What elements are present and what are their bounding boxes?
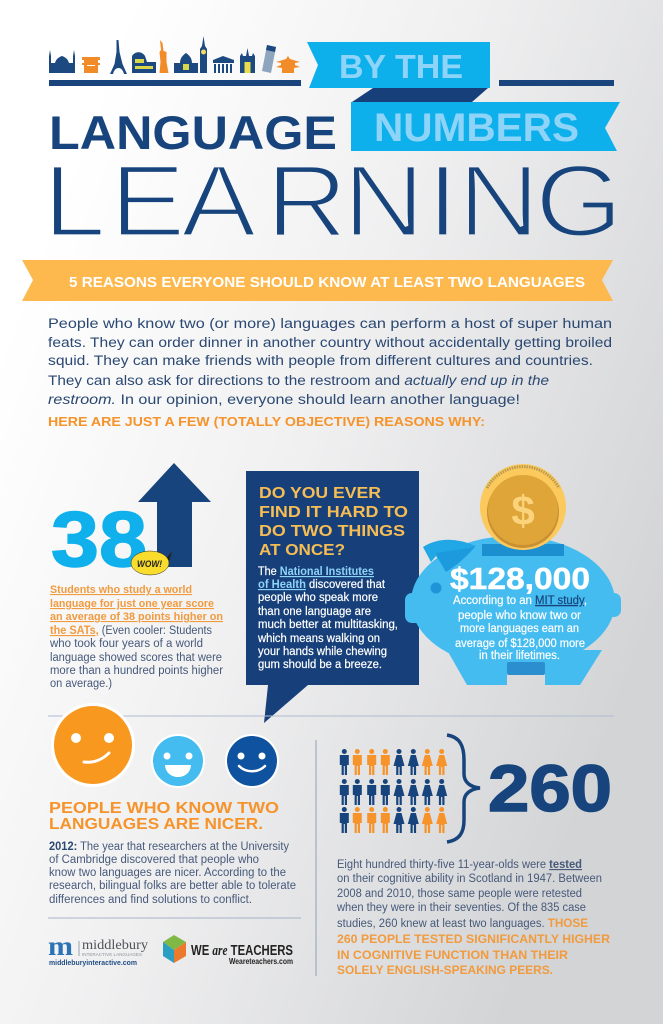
icon: torii gate [82,57,100,73]
sat text: language for just one year score [50,598,214,610]
logo: we are teachers: Weareteachers.com [229,957,293,966]
intro paragraph: restroom. In our opinion, everyone should learn another language! [48,392,520,407]
gold coin [480,464,566,550]
icon: navy smiley [225,734,279,788]
nicer body: know two languages are nicer. According to the [49,867,286,879]
bubble heading: DO YOU EVER [259,485,381,502]
yellow banner: 5 REASONS EVERYONE SHOULD KNOW AT LEAST TWO LANGUAGES [69,274,585,291]
nicer body: 2012: The year that researchers at the University [49,841,289,853]
piggy body [405,536,621,685]
260 conclusion: SOLELY ENGLISH-SPEAKING PEERS. [337,963,553,977]
logo: middlebury: middlebury [82,938,148,953]
panel: nicer [49,703,296,906]
skyline bar [49,80,301,86]
ribbon: numbers: NUMBERS [374,106,579,150]
icon: leaning tower of pisa [262,45,276,73]
piggy text [453,595,587,662]
260 conclusion: IN COGNITIVE FUNCTION THAN THEIR [337,948,568,962]
bubble body: which means walking on [257,633,380,645]
panel: 260 [336,735,612,977]
sat text: the SATs, (Even cooler: Students [50,625,212,637]
260 body: 2008 and 2010, those same people were retested [337,888,582,900]
row 1 [340,749,447,775]
intro paragraph: feats. They can order dinner in another country without accidentally getting broiled [48,335,612,350]
icon: big ben [200,36,207,73]
ribbon fold [352,88,488,102]
sat text: an average of 38 points higher on [50,611,223,623]
bubble body: people who speak more [258,592,378,604]
title: language: LANGUAGE [49,106,337,159]
row 3 [340,807,447,833]
icon: cube [163,935,186,963]
bubble heading: DO TWO THINGS [259,523,405,540]
logo: we are teachers: WE are TEACHERS [191,943,293,959]
sat text [49,584,223,690]
landmark skyline icons [49,36,300,74]
reasons lead-in: HERE ARE JUST A FEW (TOTALLY OBJECTIVE) REASONS WHY: [48,414,485,429]
nicer heading: PEOPLE WHO KNOW TWO [49,800,279,817]
icon: eiffel tower [110,40,127,74]
section divider [48,715,614,717]
bubble body: of Health discovered that [258,579,386,591]
logo: we are teachers [163,935,293,966]
panel: piggy bank [405,464,621,685]
brace [447,735,480,842]
sat text: on average.) [50,678,112,690]
icon: brandenburg gate [213,56,234,73]
icon: cathedral [240,48,255,73]
bubble body: gum should be a breeze. [258,659,382,671]
260 body: studies, 260 knew at least two languages. THOSE [337,916,588,930]
nicer body [49,841,296,906]
column divider [315,740,317,976]
piggy text: more languages earn an [460,623,579,635]
right bar [499,80,614,86]
panel: 38 points [49,463,223,690]
sat text: language showed scores that were [50,652,222,664]
bubble body: than one language are [258,606,371,618]
nicer body: differences and find solutions to conflict. [49,894,252,906]
intro paragraph: squid. They can make friends with people from different cultures and countries. [48,353,593,368]
icon: taj mahal style building [174,53,198,73]
bubble heading: AT ONCE? [259,542,345,559]
icon: cyan smiley [151,734,205,788]
number 260: 260 [488,751,612,825]
260 body: Eight hundred thirty-five 11-year-olds were tested [337,859,582,871]
logo: middlebury [48,931,148,967]
intro paragraph [48,316,612,407]
icon: statue of liberty [160,40,168,73]
bubble body: much better at multitasking, [258,619,398,631]
bubble body [257,566,398,671]
icon: orange smiley [51,703,135,787]
bubble heading [259,485,408,559]
nicer body: research, bilingual folks are better able to tolerate [49,880,296,892]
ribbon: numbers [351,102,620,151]
icon: pagoda [276,56,300,73]
sat text: who took four years of a world [49,638,203,650]
bubble body: The National Institutes [258,566,374,578]
gold coin: $ [511,487,535,534]
logo: middlebury: m [48,931,74,961]
260 conclusion [337,932,610,977]
nicer heading [49,800,279,833]
panel: multitasking speech bubble [246,471,419,723]
piggy text: people who know two or [458,610,581,622]
260 body: when they were in their seventies. Of the 835 case [336,902,586,914]
footer divider [48,917,301,919]
bubble heading: FIND IT HARD TO [259,504,408,521]
logo: middlebury: middleburyinteractive.com [49,958,137,967]
yellow banner [22,260,613,301]
nicer body: of Cambridge discovered that people who [49,854,259,866]
260 body: on their cognitive ability in Scotland in 1947. Between [337,873,602,885]
wow burst: WOW! [137,559,162,569]
logo: middlebury: INTERACTIVE LANGUAGES [82,952,142,957]
piggy text: in their lifetimes. [479,650,560,662]
bubble body: your hands while chewing [258,646,387,658]
sat text: Students who study a world [50,584,192,596]
number 38: 38 [51,495,147,583]
title: learning: LEARNING [43,144,623,258]
ribbon: by the: BY THE [339,48,463,85]
piggy text: According to an MIT study, [453,595,587,607]
ribbon: by the [307,42,490,88]
arrow up [138,463,211,567]
piggy text: average of $128,000 more [455,638,585,650]
260 body [336,859,602,930]
wow burst [131,551,172,575]
nicer heading: LANGUAGES ARE NICER. [49,816,263,833]
intro paragraph: They can also ask for directions to the restroom and actually end up in the [48,373,549,388]
row 2 [340,779,447,805]
sat text: more than a hundred points higher [50,665,223,677]
amount: $128,000 [450,561,590,596]
260 conclusion: 260 PEOPLE TESTED SIGNIFICANTLY HIGHER [337,932,610,946]
icon: blue mosque [49,50,75,73]
people grid [340,749,447,833]
icon: colosseum [132,52,156,73]
intro paragraph: People who know two (or more) languages can perform a host of super human [48,316,612,331]
